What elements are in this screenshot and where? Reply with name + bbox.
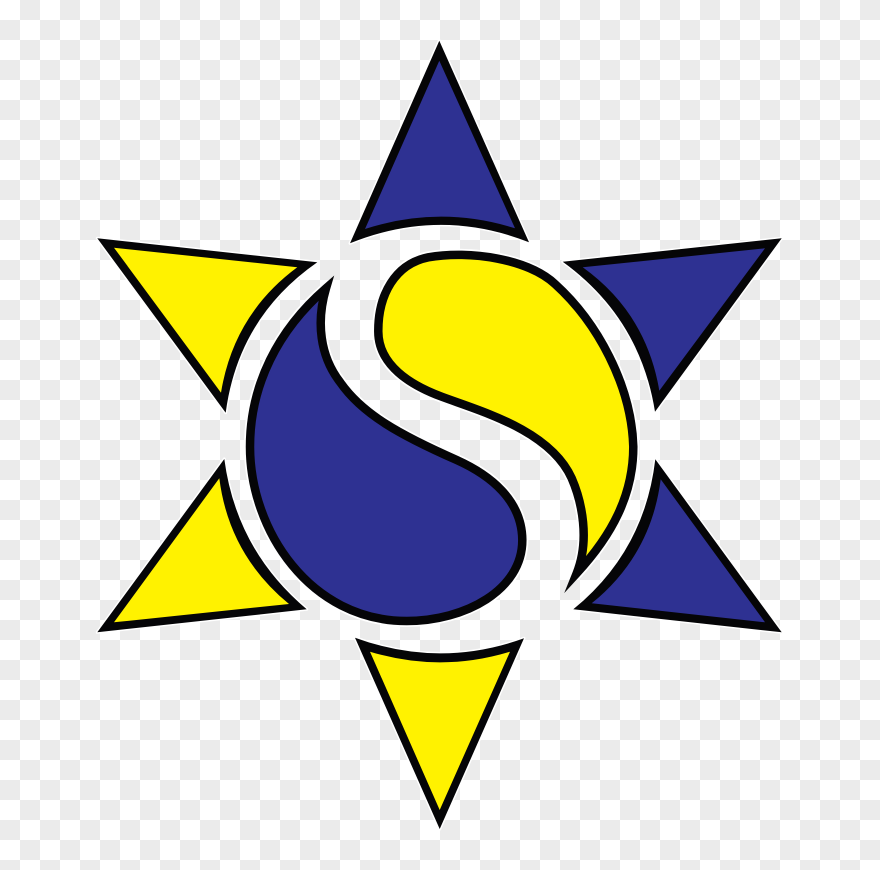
central S: yellow teardrop xyxy=(378,255,633,573)
star point: upper-left yellow triangle xyxy=(97,238,317,413)
star point: upper-right blue triangle xyxy=(563,238,782,412)
star point: lower-right blue triangle xyxy=(573,459,782,632)
star point: top blue triangle xyxy=(350,41,529,243)
central S: blue teardrop xyxy=(250,288,522,621)
star point: lower-left yellow triangle xyxy=(97,459,307,632)
white halo around central S xyxy=(250,255,633,621)
star point: bottom yellow triangle xyxy=(355,638,524,829)
